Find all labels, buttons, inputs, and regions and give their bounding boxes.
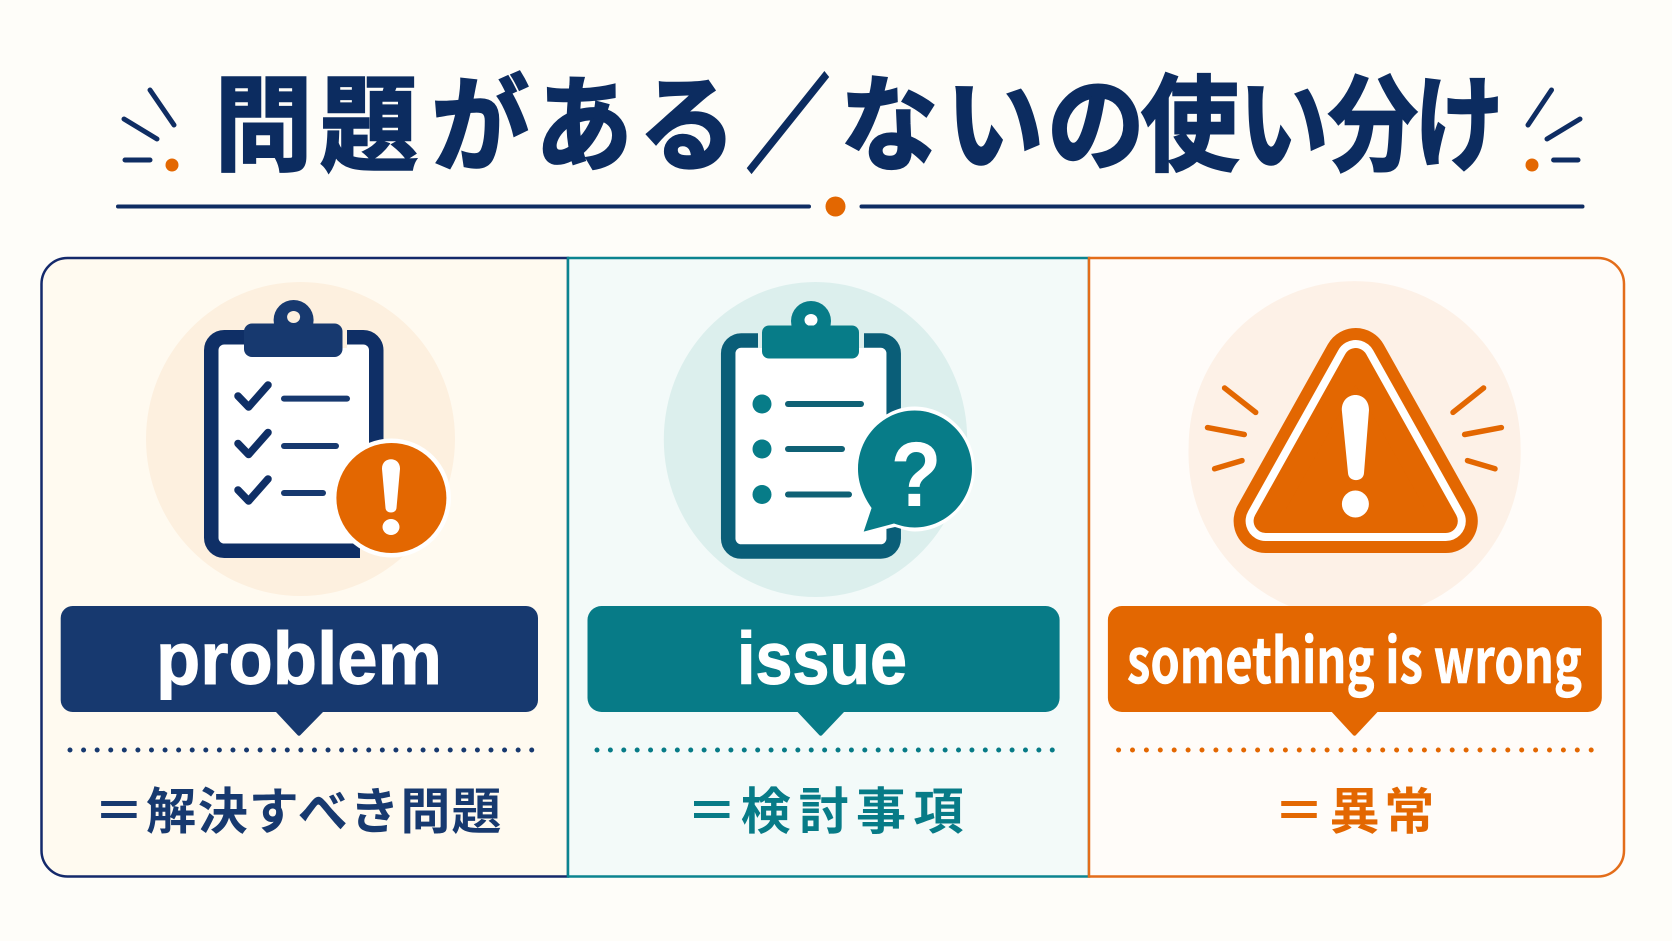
title: 問題がある — [215, 42, 736, 193]
definition: something is wrong: ＝異常 — [1274, 772, 1434, 844]
callout: problem: problem — [156, 617, 442, 700]
icon: clipboard list with question bubble — [728, 301, 975, 552]
icon: left title sparkle — [124, 90, 178, 172]
icon: right title sparkle — [1526, 90, 1580, 172]
icon: clipboard list with question bubble: ? — [891, 423, 941, 526]
icon background circle: something is wrong — [1188, 281, 1521, 606]
icon: clipboard checklist with exclamation badge — [211, 300, 451, 562]
callout: problem — [61, 606, 538, 736]
icon background circle: problem — [146, 282, 455, 596]
callout: issue: issue — [737, 617, 907, 700]
callout: something is wrong — [1108, 606, 1602, 736]
title: ないの使 — [840, 42, 1239, 193]
panel: problem — [42, 258, 568, 876]
definition: issue: ＝検討事項 — [687, 772, 963, 844]
icon background circle: issue — [664, 282, 967, 597]
callout: issue — [588, 606, 1060, 736]
panel: something is wrong — [1089, 258, 1624, 876]
title — [215, 41, 1504, 193]
title: ／ — [746, 43, 830, 193]
title underline — [118, 196, 1582, 216]
definition: problem: ＝解決すべき問題 — [94, 772, 501, 844]
panel: issue — [568, 258, 1089, 876]
title: い分け — [1239, 41, 1504, 192]
icon: warning triangle with rays — [1208, 360, 1501, 521]
